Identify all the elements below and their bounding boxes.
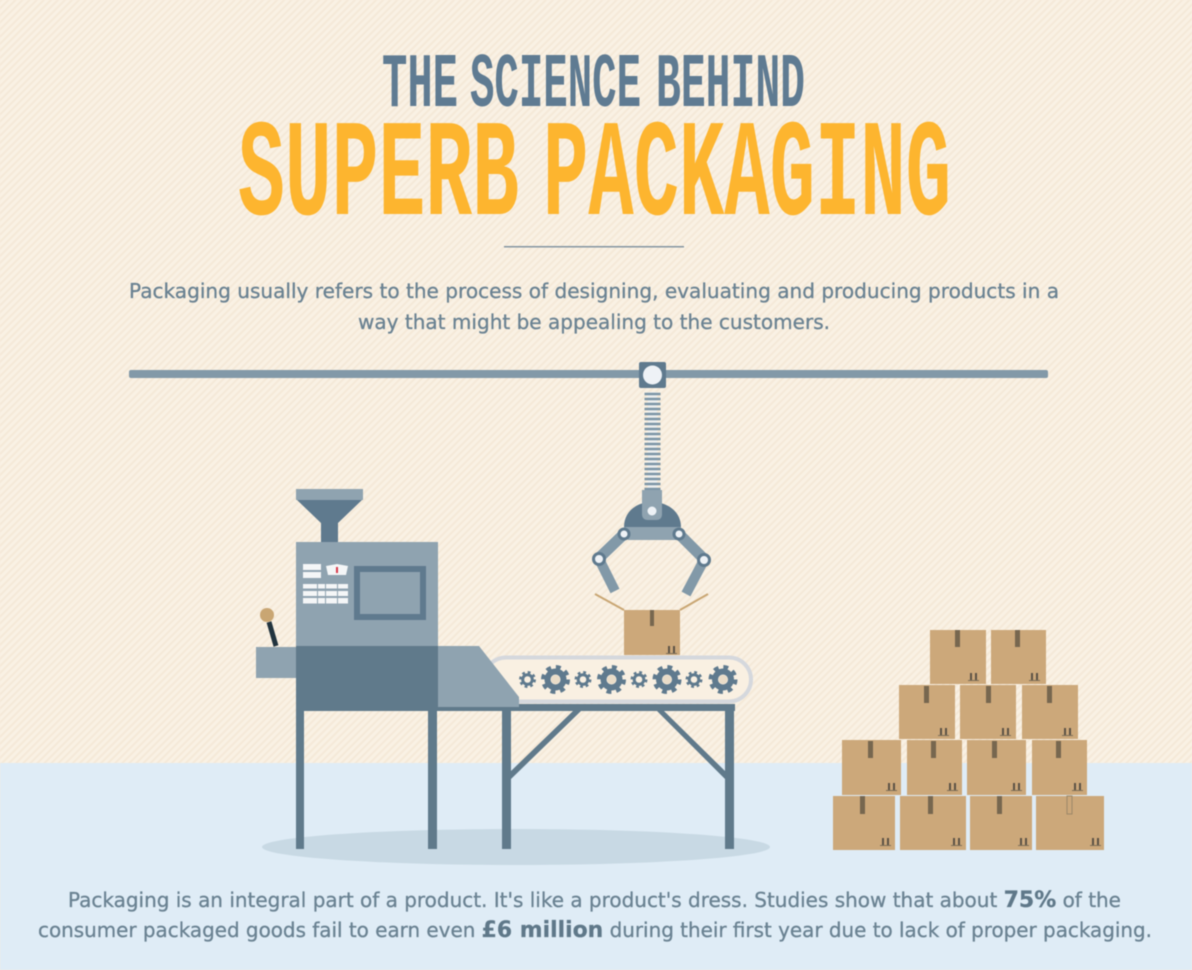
machine upper body (296, 542, 438, 646)
background: pale blue floor (0, 763, 1192, 970)
closing text: consumer packaged goods fail to earn even £6 million during their first year due to lack of proper packaging. (38, 918, 1152, 943)
machine legs and table (296, 704, 735, 849)
lever (260, 608, 276, 646)
control panel (303, 564, 348, 604)
claw arms (599, 534, 704, 594)
rail carriage (639, 362, 666, 388)
claw base (624, 527, 681, 540)
conveyor gears (521, 668, 734, 691)
box handling marks (880, 673, 1101, 846)
machine screen (357, 569, 423, 617)
icon: robotic claw (594, 362, 710, 594)
closing text: Packaging is an integral part of a product. It's like a product's dress. Studies show that about 75% of the (68, 888, 1121, 913)
left shelf (256, 647, 296, 678)
claw dome (624, 502, 681, 527)
open box on conveyor (595, 594, 708, 655)
box row 3 (842, 740, 1087, 795)
title: the science behind: BEHIND (656, 43, 805, 130)
hopper (296, 489, 363, 542)
title divider (504, 246, 684, 248)
floor shadow (262, 829, 770, 865)
intro text: way that might be appealing to the customers. (358, 310, 830, 334)
stacked boxes (833, 630, 1104, 850)
box row 4 (833, 796, 1104, 850)
title: the science behind: SCIENCE (470, 43, 641, 130)
background: cream striped wall (0, 0, 1192, 764)
intro text: Packaging usually refers to the process of designing, evaluating and producing products in a (129, 279, 1059, 303)
box tapes (860, 630, 1072, 814)
claw joints (594, 506, 710, 566)
claw neck (642, 490, 662, 520)
title: the science behind: THE (382, 43, 458, 130)
machine lower body (296, 646, 438, 711)
box row 1 (930, 630, 1046, 684)
right chute (438, 646, 519, 707)
closing text (38, 888, 1152, 943)
title: superb packaging (238, 100, 951, 256)
spring arm (644, 392, 660, 492)
packaging machine (256, 489, 519, 711)
intro text (129, 279, 1059, 334)
box row 2 (899, 685, 1078, 739)
overhead rail (129, 370, 1048, 378)
title: superb packaging: SUPERB (238, 100, 519, 256)
conveyor belt (484, 658, 751, 702)
